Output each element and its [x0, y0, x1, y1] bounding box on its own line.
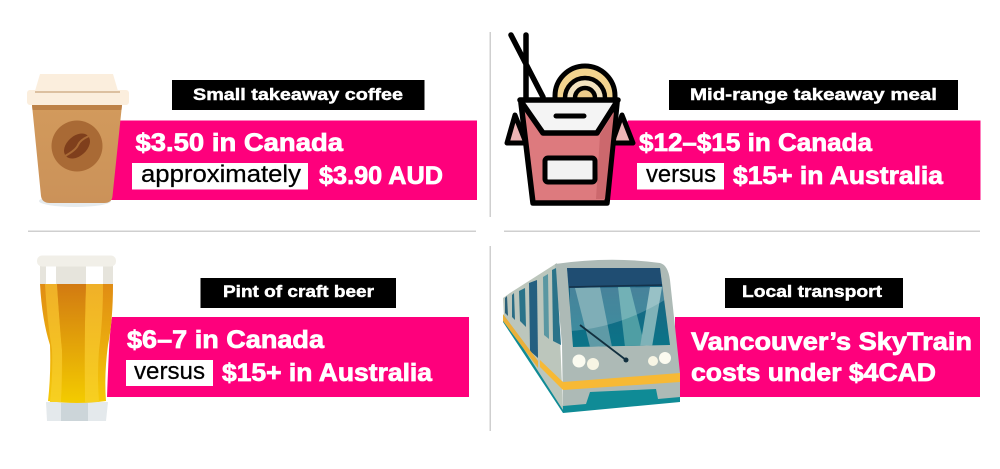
transport price band: [675, 317, 980, 397]
text: SkyTrain cost: costs under $4CAD: [691, 359, 936, 387]
icon: noodle box with chopsticks: [507, 35, 633, 203]
tag: versus: versus: [646, 161, 716, 188]
price text: meal in Australia: $15+ in Australia: [733, 162, 944, 190]
panel: mid-range takeaway meal: [507, 35, 980, 203]
icon: coffee cup: [27, 74, 129, 207]
meal price band: [608, 120, 980, 200]
panel: small takeaway coffee: [27, 74, 477, 207]
heading label: coffee: Small takeaway coffee: [193, 85, 403, 104]
text: SkyTrain cost: Vancouver’s SkyTrain: [691, 328, 972, 356]
heading label: meal: Mid-range takeaway meal: [690, 85, 937, 104]
price text: coffee in Canada: $3.50 in Canada: [136, 129, 344, 157]
panel: pint of craft beer: [37, 256, 469, 421]
heading label: transport: Local transport: [742, 282, 882, 301]
icon: beer glass: [37, 256, 116, 421]
icon: SkyTrain: [503, 260, 680, 413]
beer price band: [107, 317, 469, 397]
heading label: beer: Pint of craft beer: [223, 282, 374, 301]
text: SkyTrain cost: [691, 328, 972, 387]
heading label: meal: [669, 80, 958, 110]
tag: versus: versus: [134, 358, 205, 385]
price text: beer in Australia: $15+ in Australia: [222, 359, 433, 387]
price text: beer in Canada: $6–7 in Canada: [127, 326, 325, 354]
heading label: coffee: [172, 80, 424, 110]
price text: meal in Canada: $12–$15 in Canada: [639, 129, 873, 157]
price text: coffee in AUD: $3.90 AUD: [319, 162, 443, 190]
panel: local transport: [503, 260, 980, 413]
coffee price band: [109, 120, 477, 200]
heading label: beer: [200, 278, 396, 308]
tag: approximately: approximately: [141, 161, 301, 188]
heading label: transport: [725, 278, 903, 308]
